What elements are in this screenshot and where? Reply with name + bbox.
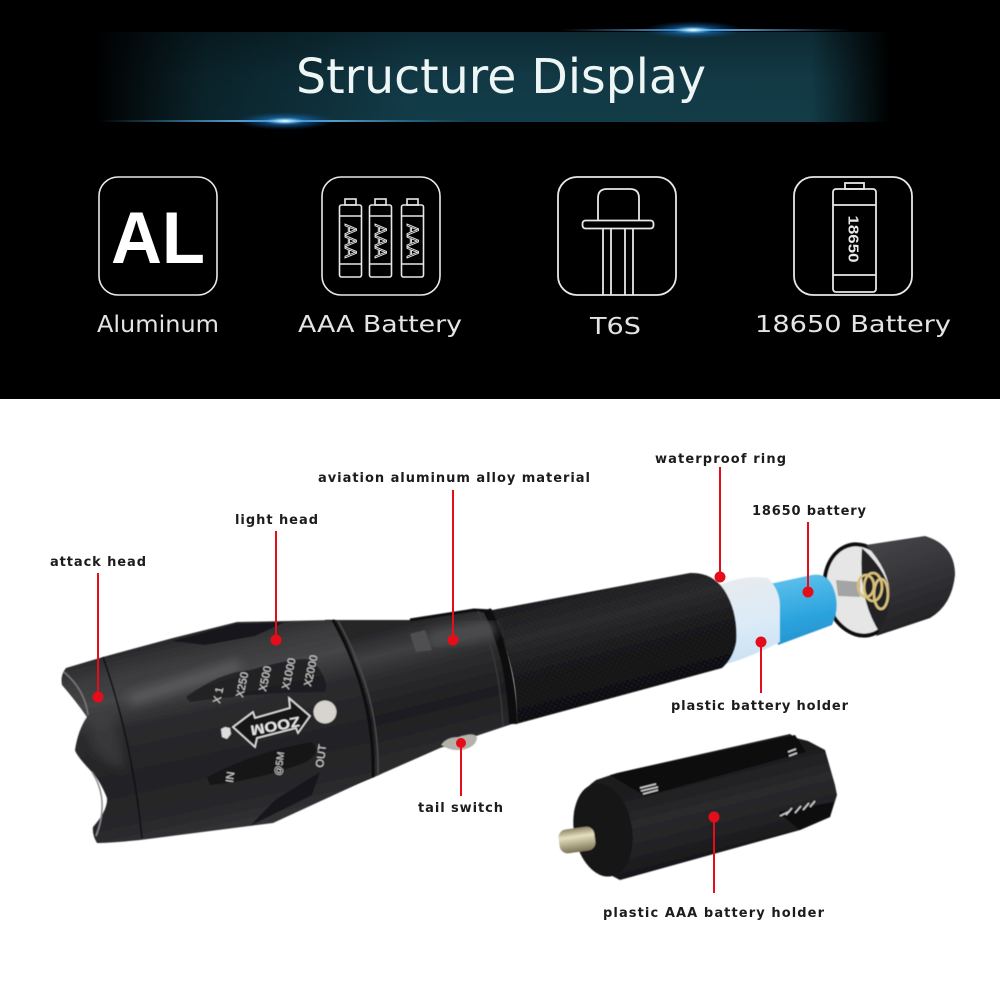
icon: aluminum (99, 177, 217, 295)
panel: white product area (0, 399, 1000, 1000)
title: Structure Display (296, 49, 706, 105)
blue 18650 battery (765, 575, 837, 645)
callout: aviation aluminum alloy material (318, 471, 590, 646)
zoom scale markings: @5M (273, 751, 287, 776)
callout: light head (235, 513, 318, 646)
zoom scale markings (211, 654, 329, 783)
title band with lens flares (95, 21, 890, 130)
icon label: Aluminum: Aluminum (97, 310, 219, 338)
flashlight (62, 535, 955, 843)
icon: AAA batteries: AAA (403, 224, 422, 259)
callout: waterproof ring (655, 452, 786, 582)
icon: aluminum: AL (111, 198, 205, 279)
tail switch button (441, 734, 477, 750)
zoom arrow badge: ZOOM (249, 714, 301, 739)
callout: light head: light head (235, 513, 318, 528)
callout: 18650 battery: 18650 battery (752, 504, 867, 519)
battery cap (814, 535, 955, 645)
icon: AAA batteries: AAA (341, 224, 360, 259)
zoom scale markings: X500 (257, 665, 274, 693)
icon: T6S LED (558, 177, 676, 295)
callout: aviation aluminum alloy material: aviation aluminum alloy material (318, 471, 590, 486)
callout: plastic battery holder (671, 636, 849, 714)
zoom arrow badge (221, 698, 336, 747)
icon label: T6S: T6S (589, 312, 641, 340)
callout: waterproof ring: waterproof ring (655, 452, 786, 467)
panel: black header (0, 0, 1000, 399)
callout: plastic AAA battery holder (603, 812, 825, 921)
zoom scale markings: X2000 (302, 654, 321, 688)
callout: attack head (50, 555, 146, 702)
neck and collar (325, 610, 518, 790)
zoom scale markings: X250 (234, 671, 251, 699)
zoom scale markings: X1000 (280, 657, 299, 691)
callout: plastic AAA battery holder: plastic AAA battery holder (603, 906, 825, 921)
AAA battery holder (558, 734, 837, 881)
zoom scale markings: OUT (314, 743, 329, 768)
callout: plastic battery holder: plastic battery holder (671, 699, 849, 714)
icon: 18650 battery: 18650 (844, 216, 860, 262)
icon: AAA batteries: AAA (371, 224, 390, 259)
plastic battery holder ring (700, 577, 780, 670)
zoom scale markings: IN (224, 771, 238, 783)
zoom scale markings: X 1 (211, 686, 226, 705)
callout: tail switch (418, 738, 503, 816)
callout: attack head: attack head (50, 555, 146, 570)
icon label: 18650 Battery: 18650 Battery (755, 310, 951, 338)
callout: tail switch: tail switch (418, 801, 503, 816)
icon label: AAA Battery: AAA Battery (298, 310, 462, 338)
icon: 18650 battery (794, 177, 912, 295)
knurled body tube (487, 573, 736, 724)
icon: AAA batteries (322, 177, 440, 295)
callout: 18650 battery (752, 504, 867, 598)
zoom head (62, 620, 378, 843)
